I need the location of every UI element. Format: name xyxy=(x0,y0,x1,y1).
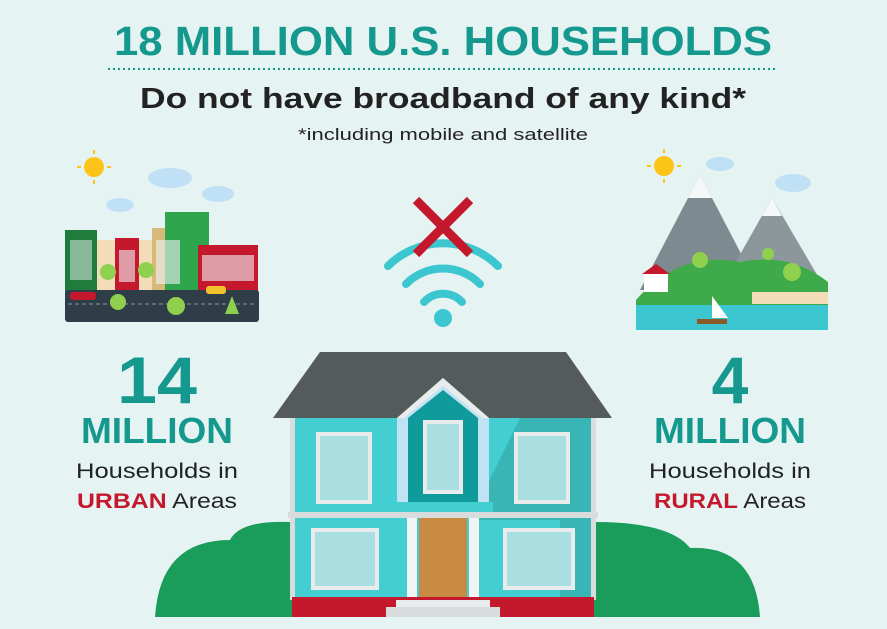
stat: rural: Households in xyxy=(649,460,811,483)
icon: no wifi xyxy=(388,200,498,327)
icon: rural scene xyxy=(636,149,828,330)
stat: urban: 14 xyxy=(117,343,197,417)
stat: rural: RURAL Areas xyxy=(654,490,806,513)
subtitle: Do not have broadband of any kind* xyxy=(140,83,747,115)
icon: city scene xyxy=(65,150,259,322)
icon: bushes xyxy=(155,522,760,617)
stat: urban: MILLION xyxy=(81,410,233,451)
stat: rural xyxy=(649,343,811,513)
stat: urban xyxy=(76,343,238,513)
stat: rural: MILLION xyxy=(654,410,806,451)
title: 18 MILLION U.S. HOUSEHOLDS xyxy=(114,18,772,64)
stat: rural: 4 xyxy=(712,343,749,417)
stat: urban: Households in xyxy=(76,460,238,483)
illustration: house xyxy=(273,352,612,617)
footnote: *including mobile and satellite xyxy=(298,125,588,144)
stat: urban: URBAN Areas xyxy=(77,490,237,513)
